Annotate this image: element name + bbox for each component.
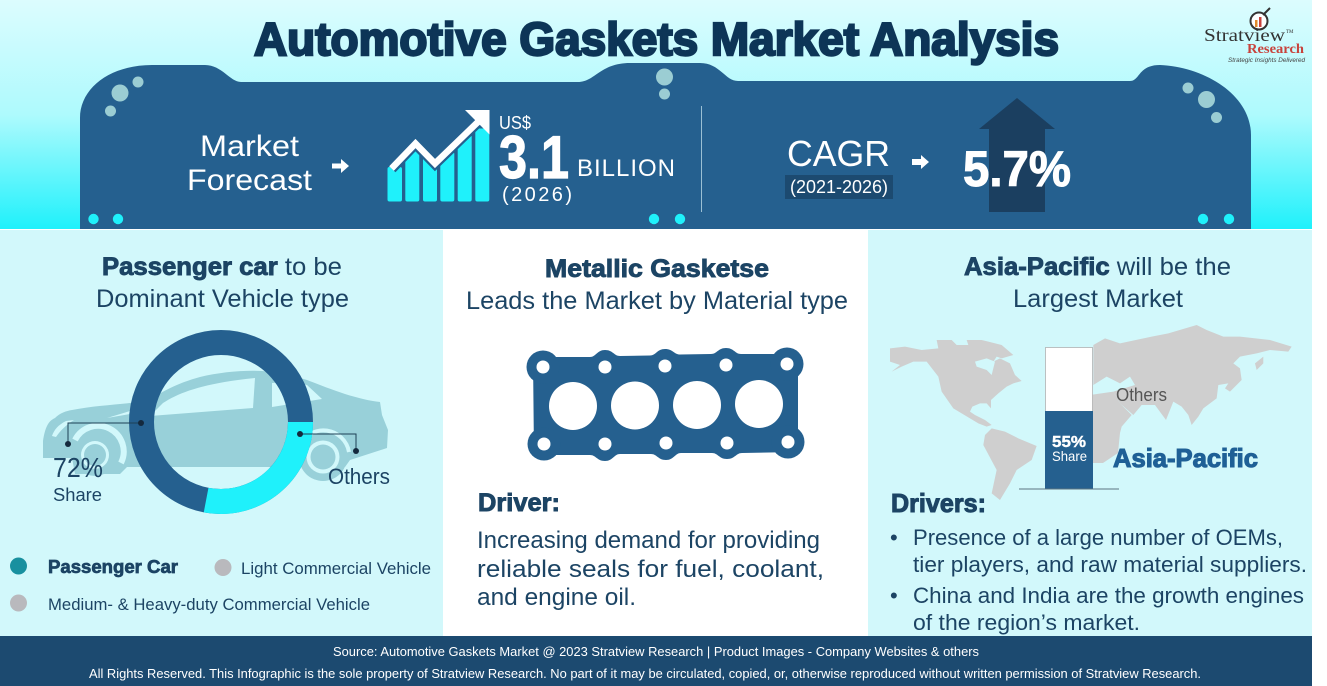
stacked bar: Asia-Pacific share	[1019, 348, 1119, 490]
heading: Asia-Pacific will be the	[964, 253, 1231, 281]
heading	[466, 255, 848, 315]
CAGR label: CAGR	[787, 133, 890, 174]
driver text: reliable seals for fuel, coolant,	[477, 556, 824, 583]
market forecast label: Forecast	[187, 164, 313, 197]
drivers list: •	[890, 525, 898, 550]
driver text	[477, 527, 824, 611]
donut chart	[142, 342, 301, 502]
callout: others: Others	[328, 464, 390, 489]
value: US$ 3.1 billion 2026: 3.1	[499, 124, 569, 191]
decorative bolts	[105, 68, 1222, 123]
icon: up arrow	[979, 98, 1055, 212]
panel: vehicle type	[0, 230, 443, 636]
drivers heading: Drivers:	[891, 488, 986, 518]
world map	[890, 325, 1292, 500]
drivers list: of the region’s market.	[913, 610, 1140, 635]
logo: Stratview Research: Research	[1247, 42, 1304, 57]
legend	[10, 557, 431, 614]
legend: Light Commercial Vehicle	[241, 559, 431, 578]
callout: others	[297, 431, 390, 489]
market forecast label: Market	[200, 130, 300, 163]
logo: Stratview Research	[1204, 8, 1305, 64]
logo: Stratview Research: Strategic Insights Delivered	[1228, 57, 1305, 64]
value: US$ 3.1 billion 2026: US$	[499, 113, 531, 133]
label: others: Others	[1116, 385, 1167, 405]
title: Automotive Gaskets Market Analysis	[254, 13, 1059, 65]
heading: Metallic Gasketse	[545, 255, 769, 283]
driver text: Increasing demand for providing	[477, 527, 820, 554]
CAGR period: (2021-2026)	[790, 177, 888, 197]
heading: Leads the Market by Material type	[466, 287, 848, 315]
arrow: forecast	[332, 159, 349, 173]
value: US$ 3.1 billion 2026	[499, 113, 675, 206]
heading	[96, 253, 349, 313]
callout: 72%: 72%	[53, 452, 103, 483]
CAGR value: 5.7%	[963, 141, 1071, 197]
callout: 72%	[53, 420, 144, 505]
divider	[701, 106, 702, 212]
panel: region	[868, 230, 1312, 636]
callout: 72%: Share	[53, 485, 102, 505]
heading: Largest Market	[1013, 285, 1183, 313]
legend: Medium- & Heavy-duty Commercial Vehicle	[48, 595, 370, 614]
footer: All Rights Reserved. This Infographic is the sole property of Stratview Research. No part of it may be circulated, copied, or, otherwise reproduced without written permission of Stratview Research.	[89, 667, 1201, 681]
icon: gasket	[526, 348, 804, 461]
footer	[0, 636, 1312, 686]
icon: growth chart	[388, 110, 490, 202]
heading	[964, 253, 1231, 313]
driver text: and engine oil.	[477, 584, 636, 611]
logo: Stratview Research: TM	[1286, 30, 1294, 35]
drivers list: tier players, and raw material suppliers.	[913, 552, 1307, 577]
arrow: CAGR	[912, 155, 929, 169]
car silhouette	[43, 371, 388, 481]
footer: Source: Automotive Gaskets Market @ 2023 Stratview Research | Product Images - Company Websites & others	[333, 645, 979, 659]
drivers list: China and India are the growth engines	[913, 583, 1304, 608]
header background	[0, 0, 1312, 229]
drivers list: •	[890, 583, 898, 608]
value: US$ 3.1 billion 2026: BILLION	[577, 155, 675, 182]
label: Asia-Pacific: Asia-Pacific	[1113, 443, 1258, 473]
driver heading: Driver:	[478, 489, 560, 517]
heading: Dominant Vehicle type	[96, 285, 349, 313]
drivers list	[890, 525, 1307, 635]
legend: Passenger Car	[48, 557, 178, 577]
panel: material type	[445, 230, 867, 636]
stacked bar: Asia-Pacific share: 55%	[1052, 434, 1086, 451]
decorative cyan dots	[88, 214, 1234, 224]
value: US$ 3.1 billion 2026: (2026)	[502, 184, 572, 206]
logo: Stratview Research: Stratview	[1204, 25, 1285, 45]
drivers list: Presence of a large number of OEMs,	[913, 525, 1283, 550]
panel: market forecast banner	[80, 63, 1251, 229]
market forecast label	[187, 130, 313, 197]
heading: Passenger car to be	[102, 253, 342, 281]
stacked bar: Asia-Pacific share: Share	[1052, 448, 1087, 464]
